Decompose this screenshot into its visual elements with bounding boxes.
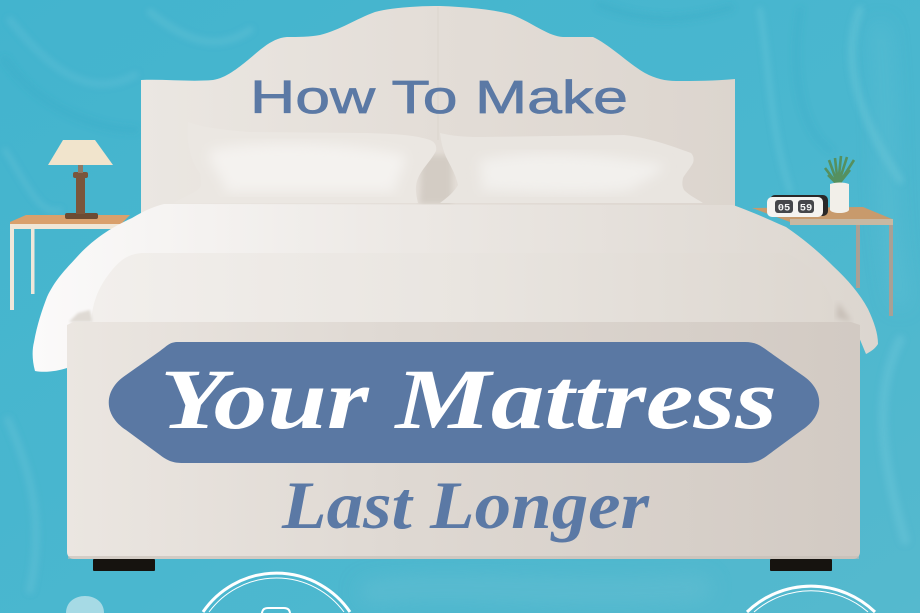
bottom left light dot	[66, 596, 104, 613]
left nightstand with lamp	[10, 140, 130, 310]
nightstand top	[10, 215, 130, 226]
left pillow	[173, 122, 436, 203]
lamp base and stem	[65, 164, 98, 219]
bottom right circle icon, cropped	[747, 586, 875, 612]
alarm clock	[767, 195, 828, 217]
nightstand top	[752, 207, 892, 222]
footboard	[67, 322, 860, 559]
right pillow	[440, 133, 703, 203]
plant	[825, 156, 854, 185]
duvet	[33, 204, 878, 372]
alarm clock: 05	[778, 202, 790, 214]
nightstand legs	[10, 226, 34, 310]
bottom left circle icon, cropped	[203, 573, 350, 613]
alarm clock: 59	[800, 202, 812, 214]
lamp shade	[48, 140, 113, 165]
heading: How To Make: How To Make	[250, 71, 628, 123]
heading: Your Mattress: Your Mattress	[160, 351, 777, 447]
plant pot	[830, 182, 849, 213]
headboard	[141, 6, 735, 225]
pillows	[173, 122, 703, 204]
mattress front	[91, 253, 836, 325]
nightstand legs	[856, 224, 893, 316]
right nightstand with clock and plant	[752, 156, 893, 316]
shadow between pillows	[420, 155, 452, 204]
heading: Last Longer: Last Longer	[281, 467, 650, 543]
banner	[109, 342, 819, 463]
bed feet	[93, 559, 832, 571]
